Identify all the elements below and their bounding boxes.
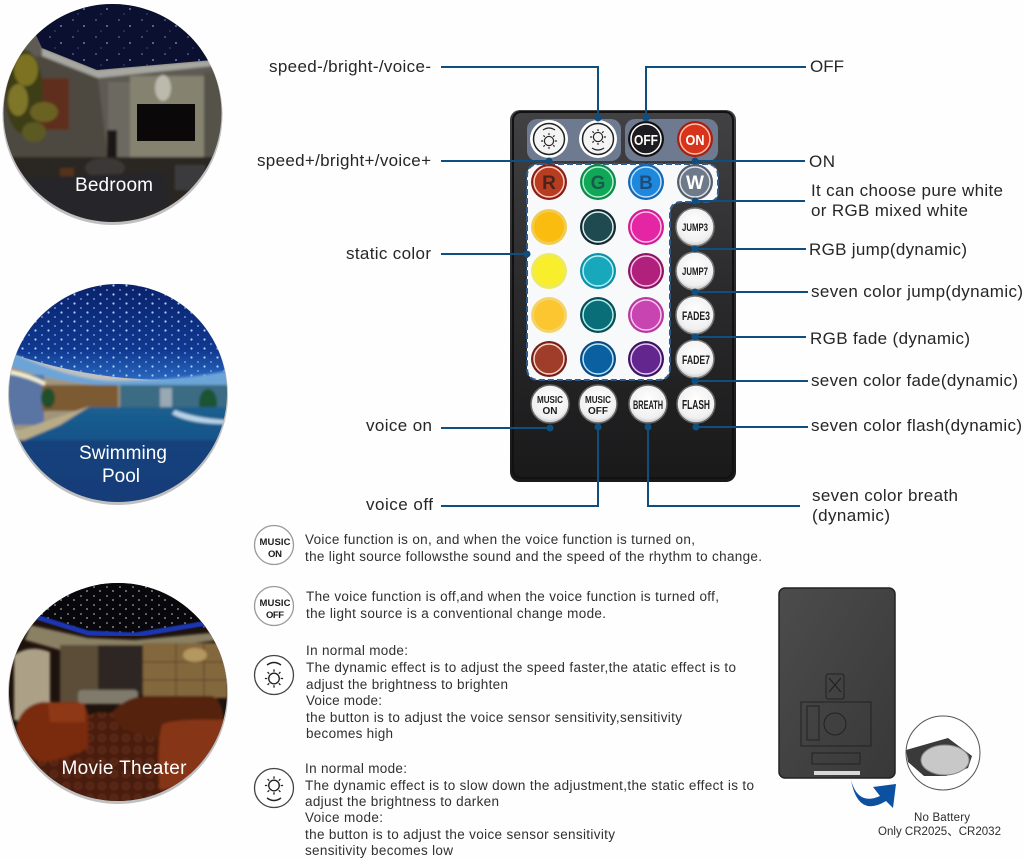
icon: music on: MUSIC [260, 537, 291, 548]
colour buttons [531, 164, 713, 377]
caption: Swimming Pool [79, 443, 167, 487]
recycle mark [826, 674, 844, 699]
button: ON [677, 121, 713, 157]
button: FADE7 [676, 340, 714, 378]
left callout labels [257, 57, 433, 514]
icon: music off [254, 586, 294, 626]
arrow: battery tray [851, 780, 896, 808]
button: MUSIC OFF [579, 385, 617, 423]
text: brightness down description: Voice mode: [305, 810, 383, 825]
panel: swimming pool photo [8, 284, 228, 505]
top button panels [527, 119, 718, 161]
text: music off description: the light source is a conventional change mode. [306, 606, 606, 621]
caption: Swimming Pool: Pool [102, 466, 140, 487]
pool star ceiling [16, 284, 226, 380]
left callout labels: static color [346, 244, 431, 263]
left callout labels: voice on [366, 416, 432, 435]
button: FADE7: FADE7 [682, 353, 710, 367]
text: brightness up description: In normal mode: [306, 643, 408, 658]
theater star ceiling [37, 583, 206, 633]
text: music on description: Voice function is on, and when the voice function is turned on, [305, 532, 695, 547]
button: MUSIC ON: ON [542, 406, 558, 417]
right callout labels: OFF [810, 57, 844, 76]
dynamic buttons [531, 208, 715, 423]
panel: remote control [510, 110, 736, 482]
bedroom star ceiling [36, 4, 208, 70]
button: FADE3 [676, 296, 714, 334]
icon: music off: OFF [266, 610, 284, 621]
icon: music on: ON [268, 549, 282, 560]
text: music off description: The voice function is off,and when the voice function is turned off, [306, 589, 719, 604]
button: G [580, 164, 616, 200]
right callout labels [809, 57, 1023, 525]
left callout labels: speed+/bright+/voice+ [257, 151, 431, 170]
right callout labels: (dynamic) [812, 506, 890, 525]
text: brightness up description [306, 643, 736, 741]
button: FADE3: FADE3 [682, 309, 710, 323]
text: brightness up description: the button is to adjust the voice sensor sensitivity,sensitivity [306, 710, 682, 725]
left callout labels: voice off [366, 495, 433, 514]
left callout labels: speed-/bright-/voice- [269, 57, 431, 76]
button: G: G [591, 173, 605, 194]
button: FLASH [677, 385, 715, 423]
button: MUSIC OFF: MUSIC [585, 395, 611, 406]
icon: battery tray circle [906, 716, 980, 790]
theater room [12, 624, 227, 801]
right callout labels: seven color flash(dynamic) [811, 416, 1022, 435]
button: BREATH [629, 385, 667, 423]
caption: Bedroom: Bedroom [75, 175, 153, 196]
text: brightness up description: becomes high [306, 726, 393, 741]
callout lines [441, 67, 808, 506]
text: music on description [305, 532, 762, 564]
button: OFF [628, 121, 664, 157]
text: brightness down description [305, 761, 754, 858]
icon: music on [254, 526, 294, 564]
caption: battery note: Only CR2025、CR2032 [878, 826, 1001, 838]
right callout labels: seven color breath [812, 486, 958, 505]
right callout labels: RGB fade (dynamic) [810, 329, 970, 348]
button: ON: ON [686, 132, 704, 149]
right callout labels: ON [809, 152, 835, 171]
button: FLASH: FLASH [682, 397, 710, 412]
caption: Swimming Pool: Swimming [79, 443, 167, 464]
button: JUMP7 [676, 252, 714, 290]
text: brightness up description: adjust the brightness to brighten [306, 677, 508, 692]
button: MUSIC OFF: OFF [588, 406, 608, 417]
text: brightness down description: In normal mode: [305, 761, 407, 776]
text: brightness up description: Voice mode: [306, 693, 382, 708]
button: BREATH: BREATH [633, 398, 663, 412]
television [137, 104, 195, 141]
remote back panel [779, 588, 895, 778]
bedroom room [4, 4, 222, 222]
text: music off description [306, 589, 719, 621]
text: music on description: the light source followsthe sound and the speed of the rhythm to change. [305, 549, 762, 564]
button: MUSIC ON: MUSIC [537, 395, 563, 406]
button: speed plus [579, 120, 617, 158]
battery compartment [801, 702, 871, 746]
button: JUMP7: JUMP7 [682, 266, 708, 278]
text: brightness down description: The dynamic effect is to slow down the adjustment,the static effect is to [305, 778, 754, 793]
button: B: B [639, 173, 653, 194]
icon: brightness up [254, 656, 294, 694]
text: brightness down description: the button is to adjust the voice sensor sensitivity [305, 827, 615, 842]
caption: Movie Theater: Movie Theater [62, 758, 187, 779]
caption: battery note [878, 812, 1001, 838]
icon: brightness down [254, 768, 294, 808]
white colour panel [527, 164, 718, 380]
caption: battery note: No Battery [914, 812, 970, 824]
button: B [628, 164, 664, 200]
panel: bedroom photo [0, 0, 230, 230]
icon: music off: MUSIC [260, 598, 291, 609]
button: JUMP3: JUMP3 [682, 222, 708, 234]
blue ceiling light [36, 617, 208, 635]
pool room [9, 354, 227, 502]
button: JUMP3 [676, 208, 714, 246]
text: brightness down description: sensitivity becomes low [305, 843, 453, 858]
right callout labels: seven color fade(dynamic) [811, 371, 1018, 390]
button: OFF: OFF [634, 132, 658, 149]
right callout labels: It can choose pure white [811, 181, 1003, 200]
button: R [531, 164, 567, 200]
text: brightness up description: The dynamic effect is to adjust the speed faster,the atatic effect is to [306, 660, 736, 675]
panel: movie theater photo [8, 583, 228, 804]
right callout labels: or RGB mixed white [811, 201, 968, 220]
text: brightness down description: adjust the brightness to darken [305, 794, 499, 809]
button: MUSIC ON [531, 385, 569, 423]
right callout labels: RGB jump(dynamic) [809, 240, 967, 259]
button: R: R [542, 173, 556, 194]
button: speed minus [530, 120, 568, 158]
button: W: W [686, 173, 704, 194]
button: W [677, 164, 713, 200]
right callout labels: seven color jump(dynamic) [811, 282, 1023, 301]
